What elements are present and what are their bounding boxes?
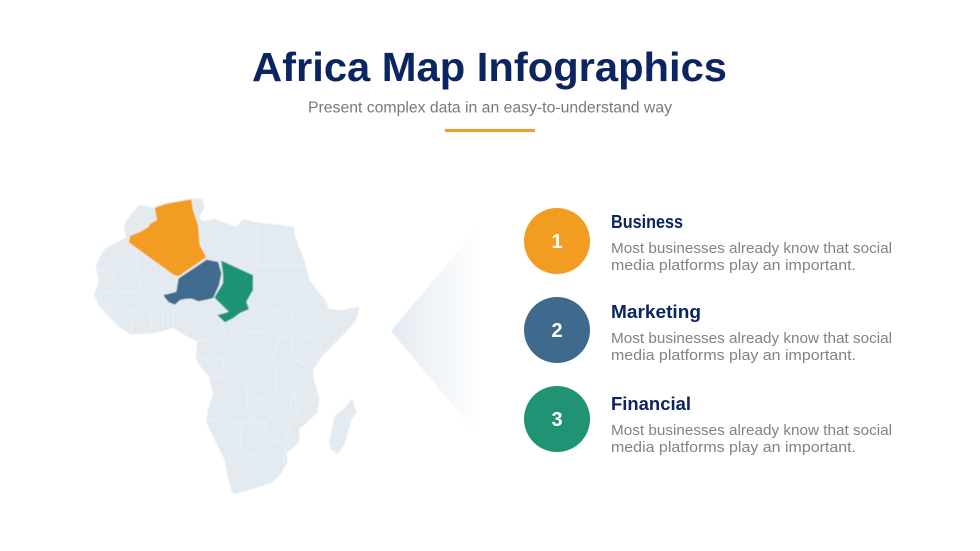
description 2: media platforms play an important. — [611, 347, 856, 364]
Chad — [214, 260, 253, 323]
item 3 — [524, 386, 892, 456]
description 3: Most businesses already know that social — [611, 422, 892, 439]
description 1: media platforms play an important. — [611, 257, 856, 274]
item 1 — [524, 208, 892, 274]
badge 2 — [524, 297, 590, 363]
heading: Financial: Financial — [611, 394, 691, 414]
badge 2: 2 — [551, 320, 563, 342]
description 2 — [611, 330, 892, 364]
Niger — [163, 259, 222, 305]
continent outline — [95, 199, 358, 493]
description 3: media platforms play an important. — [611, 439, 856, 456]
badge 3: 3 — [551, 409, 563, 431]
subtitle: Present complex data in an easy-to-understand way — [308, 100, 672, 116]
map of Africa — [95, 199, 358, 493]
description 1: Most businesses already know that social — [611, 240, 892, 257]
pointer triangle — [391, 225, 480, 438]
item 2 — [524, 297, 892, 364]
title: Africa Map Infographics — [252, 44, 727, 90]
country borders — [97, 225, 342, 477]
badge 1 — [524, 208, 590, 274]
description 1 — [611, 240, 892, 274]
heading: Business: Business — [611, 212, 683, 232]
badge 1: 1 — [551, 231, 563, 253]
Madagascar — [330, 400, 356, 452]
Algeria — [128, 199, 207, 277]
heading: Marketing: Marketing — [611, 302, 701, 322]
description 2: Most businesses already know that social — [611, 330, 892, 347]
title underline — [445, 129, 535, 132]
description 3 — [611, 422, 892, 456]
badge 3 — [524, 386, 590, 452]
